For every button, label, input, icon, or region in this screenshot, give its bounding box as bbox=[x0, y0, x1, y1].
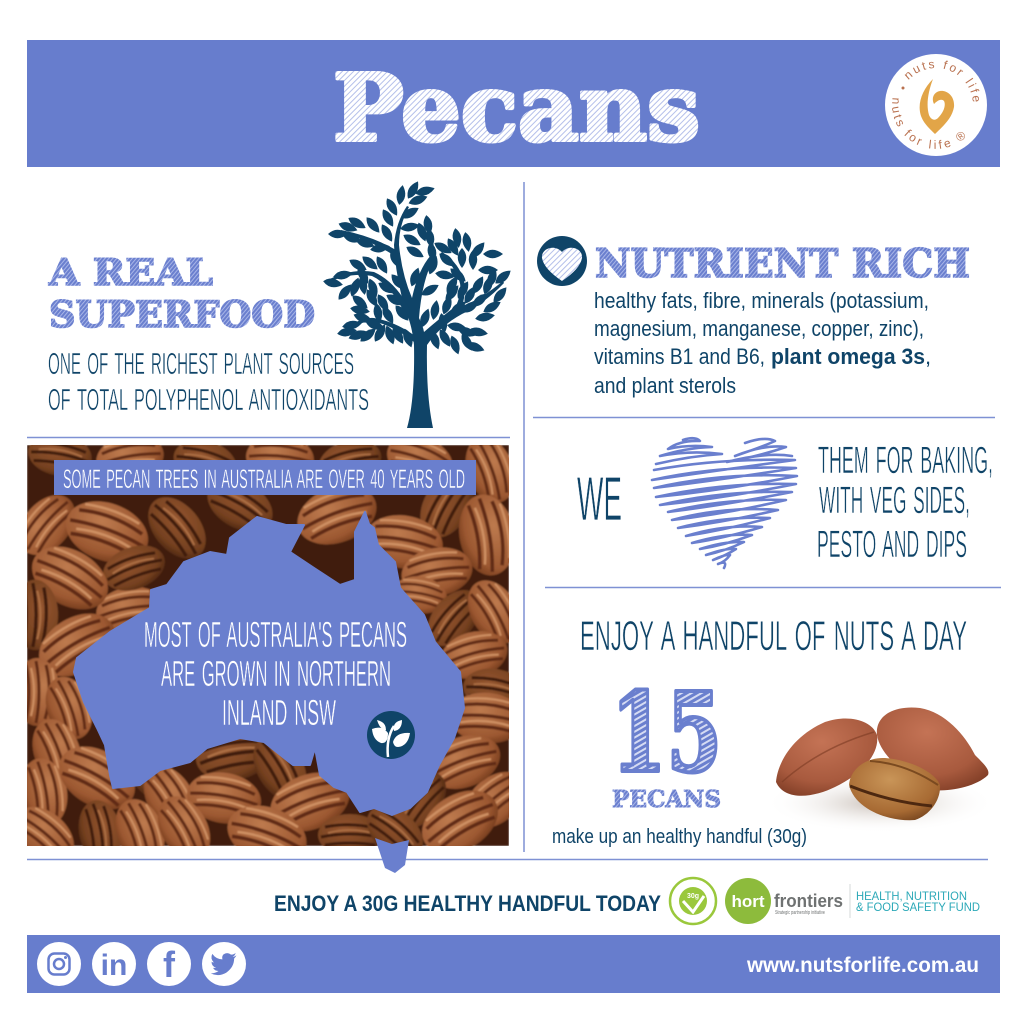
icon: facebook: f bbox=[163, 944, 176, 985]
footer bar bbox=[27, 935, 1000, 993]
icon: facebook bbox=[147, 942, 191, 986]
icon: heart badge bbox=[537, 236, 587, 286]
logo: hort frontiers: frontiers bbox=[774, 891, 843, 911]
banner: trees over 40 years bbox=[54, 460, 476, 495]
icon: twitter bbox=[202, 942, 246, 986]
panel: pecan photo with map: MOST OF AUSTRALIA'S PECANS bbox=[144, 614, 407, 655]
logo: nuts for life: nuts for life ® bbox=[892, 98, 965, 149]
icon: scribbled heart bbox=[652, 438, 797, 568]
tagline: ENJOY A 30G HEALTHY HANDFUL TODAY bbox=[274, 891, 661, 916]
logo: fund: HEALTH, NUTRITION bbox=[856, 889, 967, 903]
nutrient list: and plant sterols bbox=[594, 373, 736, 398]
text: polyphenol antioxidants: OF TOTAL POLYPHENOL ANTIOXIDANTS bbox=[48, 382, 369, 417]
title: Pecans bbox=[333, 54, 700, 162]
logo: nuts for life: nuts for life bbox=[904, 60, 980, 102]
heading: a real superfood: SUPERFOOD bbox=[49, 294, 315, 336]
map text bbox=[144, 614, 407, 733]
photo of pecans bbox=[27, 445, 509, 846]
panel: handful bbox=[552, 612, 995, 848]
logo: hort frontiers: Strategic partnership initiative bbox=[775, 910, 825, 916]
text: polyphenol antioxidants: ONE OF THE RICHEST PLANT SOURCES bbox=[48, 346, 354, 381]
map of Tasmania bbox=[375, 838, 409, 873]
nutrient list: vitamins B1 and B6, bbox=[594, 344, 765, 369]
logo: hort frontiers: hort bbox=[731, 892, 765, 911]
nutrient list: , bbox=[925, 344, 931, 369]
text: baking uses bbox=[817, 440, 993, 566]
icon: linkedin bbox=[92, 942, 136, 986]
dividers bbox=[27, 182, 1001, 860]
logo: fund: & FOOD SAFETY FUND bbox=[856, 900, 980, 914]
map of Australia bbox=[74, 512, 464, 815]
icon: tree bbox=[322, 179, 513, 428]
logo: nuts for life bbox=[885, 54, 987, 156]
heading: a real superfood bbox=[48, 252, 315, 336]
photo: three pecans bbox=[765, 707, 995, 833]
badge: 30g healthy handful bbox=[670, 878, 716, 924]
nutrient list: magnesium, manganese, copper, zinc), bbox=[594, 316, 924, 341]
number: 15: 15 bbox=[611, 668, 722, 797]
text: polyphenol antioxidants bbox=[48, 346, 369, 417]
panel: we love: WE bbox=[577, 465, 622, 534]
panel: nutrient rich bbox=[537, 236, 970, 398]
panel: we love bbox=[577, 438, 993, 568]
website: www.nutsforlife.com.au bbox=[746, 954, 979, 977]
nutrient list: plant omega 3s bbox=[771, 344, 925, 369]
header banner bbox=[27, 40, 1000, 167]
icon: linkedin: in bbox=[101, 949, 127, 982]
tagline strip bbox=[274, 878, 980, 924]
logo: fund bbox=[856, 889, 980, 914]
nutrient list bbox=[594, 288, 931, 398]
logo: hort frontiers bbox=[725, 878, 850, 924]
heading: NUTRIENT RICH bbox=[595, 241, 970, 287]
icon: instagram bbox=[37, 942, 81, 986]
icon: plant bbox=[367, 711, 415, 759]
panel: pecan photo with map bbox=[27, 445, 509, 873]
heading: a real superfood: A REAL bbox=[48, 252, 213, 294]
nutrient list: healthy fats, fibre, minerals (potassium, bbox=[594, 288, 929, 313]
panel: pecan photo with map: ARE GROWN IN NORTHERN bbox=[161, 653, 391, 694]
map text: INLAND NSW bbox=[222, 692, 336, 733]
text: healthy handful: make up an healthy handful (30g) bbox=[552, 826, 807, 848]
badge: 30g healthy handful: 30g bbox=[687, 893, 699, 900]
label: pecans: PECANS bbox=[612, 786, 721, 813]
panel: pecan photo with map: SOME PECAN TREES IN AUSTRALIA ARE OVER 40 YEARS OLD bbox=[63, 464, 465, 494]
